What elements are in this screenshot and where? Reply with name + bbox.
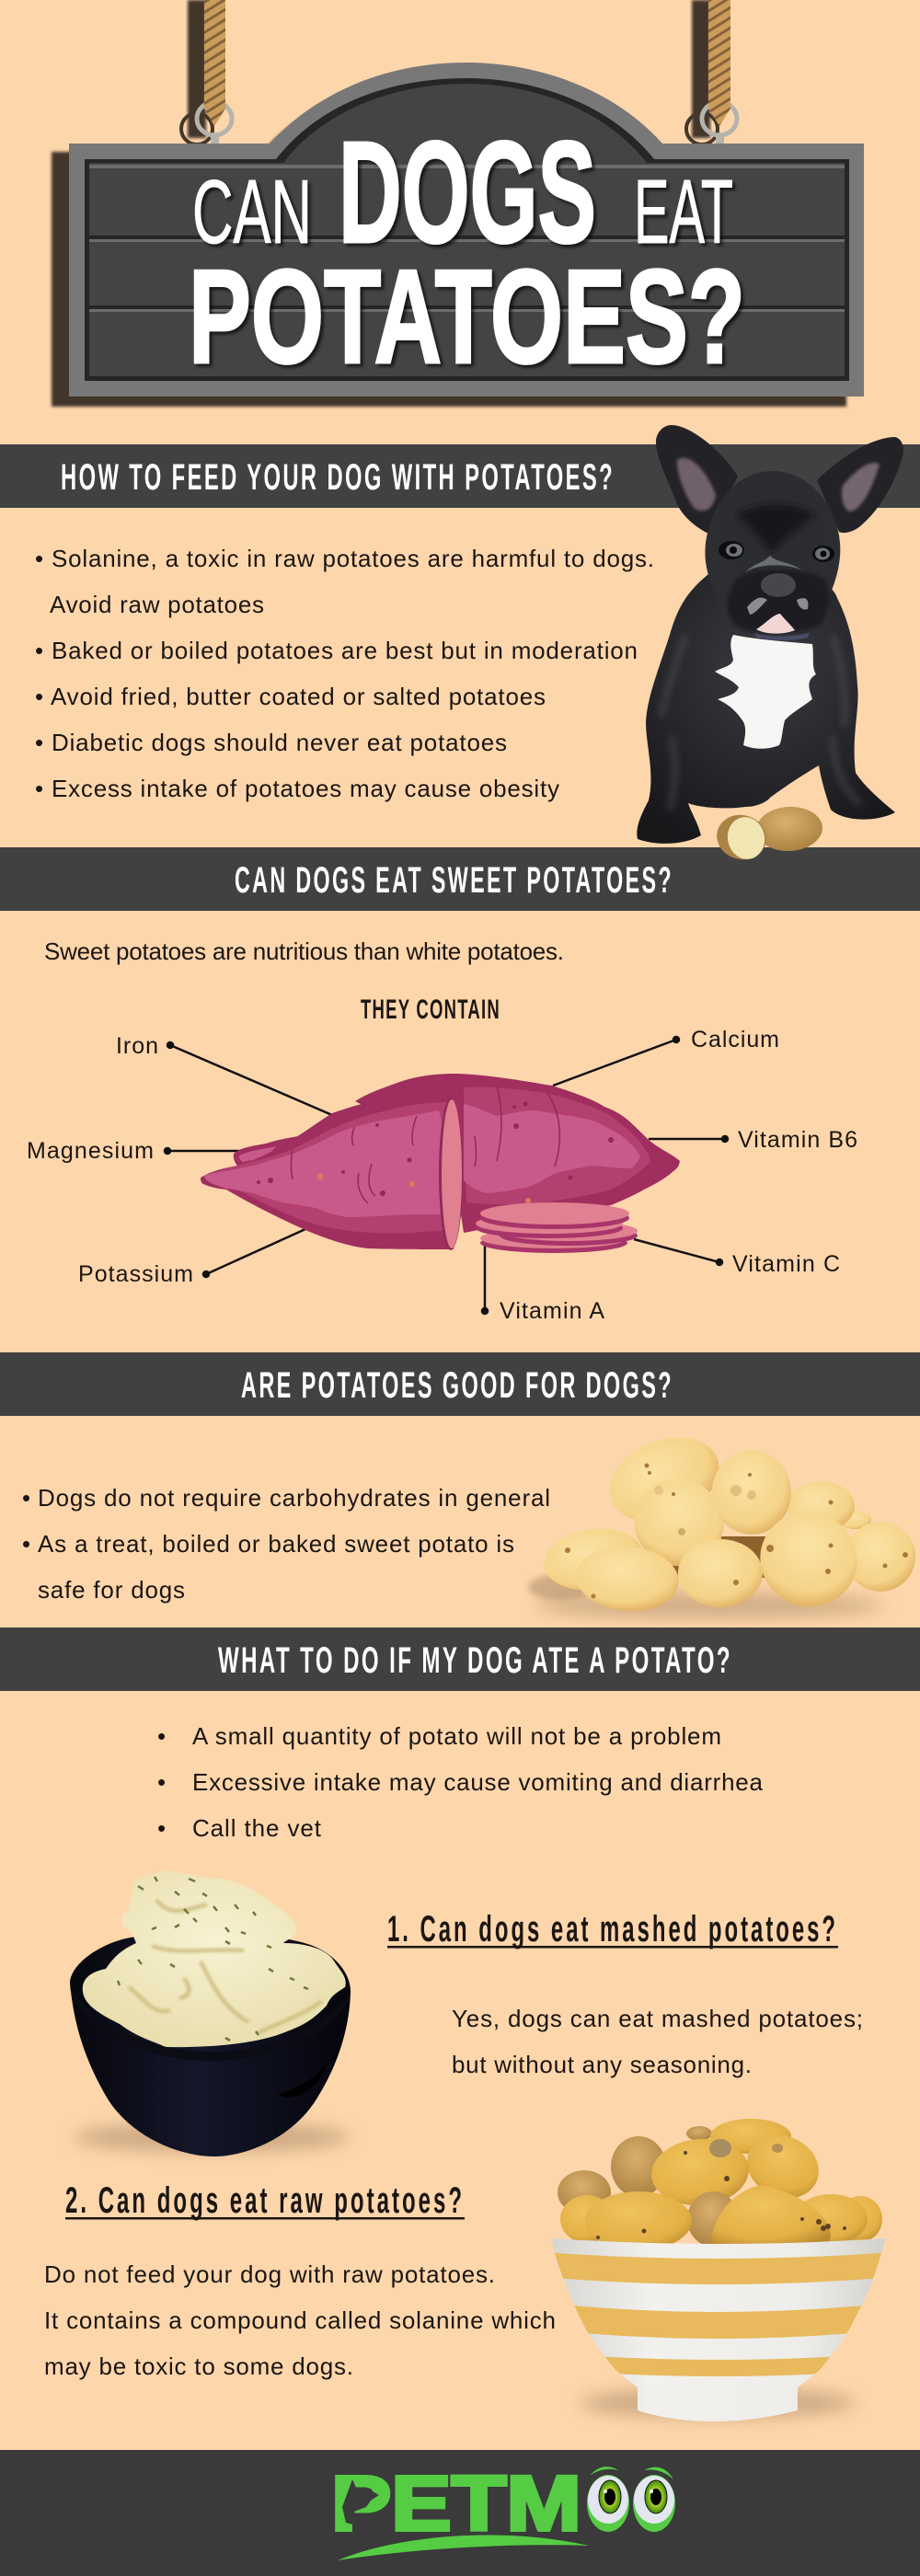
striped bowl [551,2238,886,2421]
list: how to feed: • [35,729,43,756]
list: how to feed: Avoid raw potatoes [50,591,264,618]
dog head [705,471,840,635]
list: are potatoes good: • [22,1484,30,1512]
illustration: french bulldog puppy [637,425,903,865]
swoosh [338,2536,589,2560]
mashed potato [83,1870,346,2047]
nutrient labels: Vitamin C [732,1251,840,1277]
logo: petmoo: PETM [331,2460,581,2547]
nutrient labels: Magnesium [27,1138,154,1164]
image: potato pile [528,1422,915,1623]
logo: petmoo [331,2460,675,2560]
list: how to feed: Excess intake of potatoes may cause obesity [52,775,559,802]
nutrient labels: Iron [116,1033,158,1059]
herbs [118,1877,308,2041]
list: what to do: • [157,1814,166,1842]
dog face details [719,505,834,651]
nutrient labels [27,1027,857,1324]
list: how to feed: Avoid fried, butter coated or salted potatoes [51,683,546,710]
back nub [234,1136,299,1167]
subheading: they contain: THEY CONTAIN [361,995,500,1025]
answer 1 text: but without any seasoning. [452,2051,752,2078]
potato beside dog [712,805,823,865]
list: are potatoes good: Dogs do not require carbohydrates in general [38,1484,550,1512]
list: what to do: Excessive intake may cause vomiting and diarrhea [192,1768,764,1796]
list: what to do: • [157,1722,166,1750]
list: how to feed: • [35,683,43,710]
image: raw potatoes in striped bowl [543,2119,892,2421]
list: what to do: • [157,1768,166,1796]
dog body and legs [637,570,895,844]
title: CAN [192,161,312,262]
nutrient labels: Calcium [691,1027,779,1052]
cut face [439,1098,463,1250]
spots [257,1102,614,1196]
right rope and ring [702,0,737,145]
answer 2 text: may be toxic to some dogs. [44,2352,353,2380]
title: EAT [634,161,733,262]
answer 1 text: Yes, dogs can eat mashed potatoes; [452,2005,863,2032]
nutrient labels: Vitamin B6 [738,1127,857,1153]
nutrient labels: Vitamin A [500,1298,604,1324]
footer bar [0,2450,920,2576]
list: are potatoes good [22,1484,550,1604]
list: how to feed: Diabetic dogs should never eat potatoes [52,729,507,756]
dog right ear [817,437,903,533]
back half [355,1074,680,1233]
title [189,112,745,391]
sweet potato [201,1074,680,1250]
image: mashed potatoes in black bowl [70,1870,351,2156]
section bar 4 [0,1627,920,1691]
section bar 2 [0,847,920,911]
left rope and ring [197,0,232,145]
icon: dog silhouette in logo [342,2479,379,2525]
nutrient labels: Potassium [78,1261,193,1287]
list: how to feed: Solanine, a toxic in raw potatoes are harmful to dogs. [52,545,654,572]
eyes [587,2467,675,2532]
list: are potatoes good: • [22,1530,30,1558]
answer 2 text: It contains a compound called solanine which [44,2306,556,2334]
answer 2 text: Do not feed your dog with raw potatoes. [44,2260,495,2288]
potatoes in bowl [558,2119,882,2250]
list: how to feed: • [35,775,43,802]
sign shadow [52,0,846,407]
list: how to feed [35,545,654,802]
hanging sign [52,0,864,407]
front half [201,1094,454,1249]
section bar 3 [0,1352,920,1416]
bowl front rim [70,1987,351,2061]
sign board [69,63,864,397]
dog fur highlights [661,635,860,810]
answer 2 text [44,2260,556,2380]
dog white chest [715,635,816,749]
list: are potatoes good: As a treat, boiled or baked sweet potato is [38,1530,514,1558]
question 2 heading: 2. Can dogs eat raw potatoes? [65,2180,465,2221]
leader lines [165,1037,728,1314]
list: what to do: A small quantity of potato will not be a problem [192,1722,721,1750]
list: how to feed: Baked or boiled potatoes are best but in moderation [52,637,638,664]
list: what to do [157,1722,764,1842]
title: DOGS [339,112,596,273]
list: are potatoes good: safe for dogs [38,1576,185,1604]
list: how to feed: • [35,545,43,572]
sweet potato slices [476,1202,638,1253]
dog left ear [656,425,738,534]
diagram: sweet potato nutrients [27,1027,857,1324]
section bar 1 [0,444,920,508]
answer 1 text [452,2005,863,2078]
intro line: sweet potatoes: Sweet potatoes are nutritious than white potatoes. [44,937,564,965]
list: how to feed: • [35,637,43,664]
mash folds [129,1900,322,2033]
list: what to do: Call the vet [192,1814,322,1842]
